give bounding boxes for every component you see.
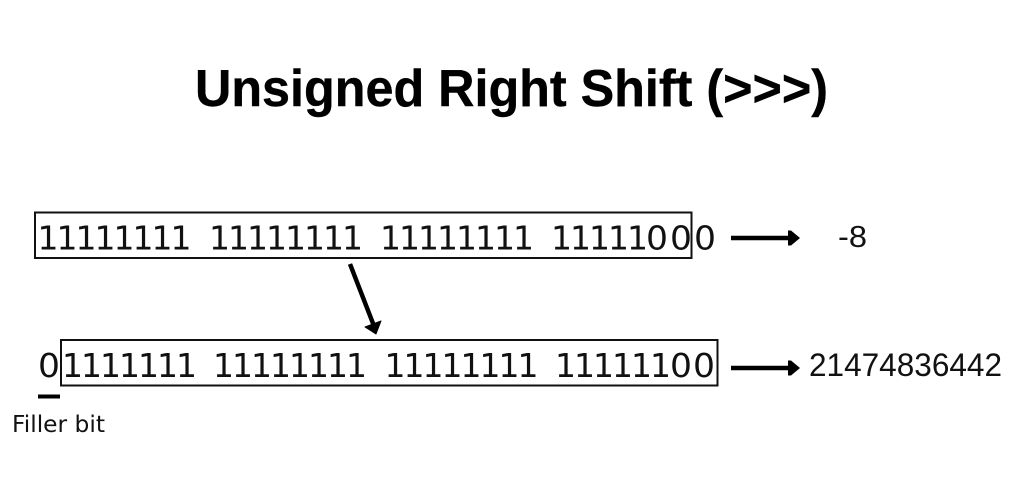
original bits row: 11111111 <box>38 218 192 258</box>
original bits row: 0 <box>670 218 692 258</box>
shifted bits row: 0 <box>38 346 60 385</box>
value: -8: -8 <box>838 219 867 254</box>
filler bit marker <box>38 394 60 398</box>
filler bit label: Filler bit <box>12 412 105 438</box>
shifted bits row: 11111111 <box>384 346 538 385</box>
arrow: shift down <box>350 264 381 334</box>
shifted bits row: 11111111 <box>213 346 367 385</box>
original bits row: 11111111 <box>209 218 363 258</box>
value: 21474836442: 21474836442 <box>809 347 1002 383</box>
shifted bits row: 0 <box>670 346 692 385</box>
arrow: value of shifted bits <box>731 360 800 376</box>
shifted bits row: 1111111 <box>62 346 197 385</box>
shifted bits row: 111111 <box>555 346 671 385</box>
original bits row <box>35 212 716 258</box>
original bits row: 0 <box>694 218 716 258</box>
shifted bits row <box>38 340 718 386</box>
shifted bits row: 0 <box>693 346 715 385</box>
title: Unsigned Right Shift (>>>) <box>195 60 828 118</box>
original bits row: 0 <box>646 218 668 258</box>
original bits row: 11111111 <box>380 218 534 258</box>
arrow: value of original bits <box>731 230 800 246</box>
original bits row: 11111 <box>551 218 648 258</box>
